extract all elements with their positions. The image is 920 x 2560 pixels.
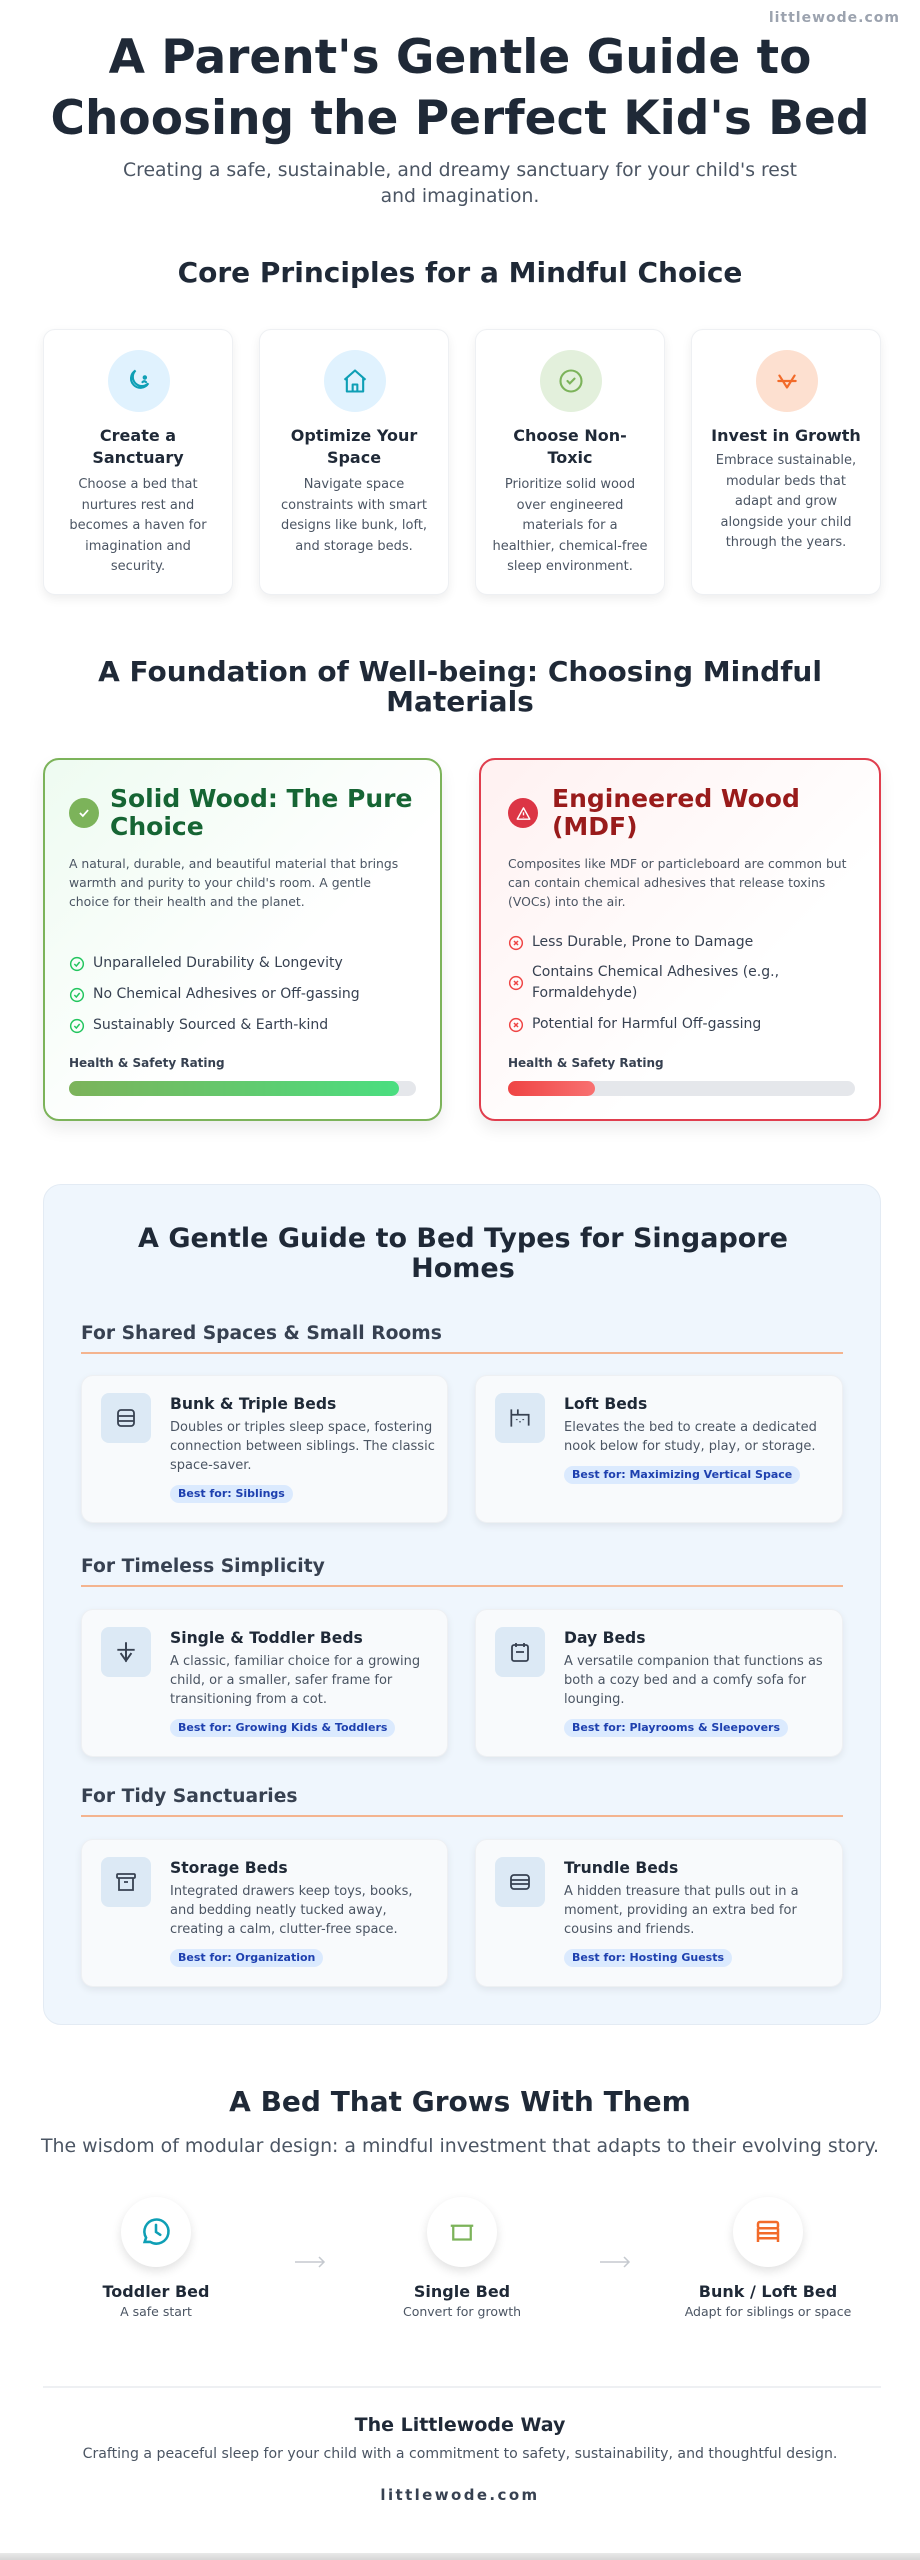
card: single: child, or a smaller, safer frame for: [170, 1673, 392, 1688]
card: bunk: Bunk & Triple Beds: [170, 1395, 336, 1413]
heading: materials: Materials: [386, 685, 534, 718]
icon: warning: [508, 798, 538, 828]
subtitle: and imagination.: [381, 186, 539, 207]
heading: core principles: Core Principles for a Mindful Choice: [178, 256, 742, 289]
card: loft: Loft Beds: [564, 1395, 647, 1413]
heading: bed types: A Gentle Guide to Bed Types for Singapore: [138, 1223, 788, 1254]
card: storage: creating a calm, clutter-free space.: [170, 1922, 398, 1937]
card: growth: through the years.: [726, 535, 846, 550]
card: sanctuary: security.: [111, 559, 165, 574]
card: day bed: [475, 1609, 843, 1757]
card: optimize: designs like bunk, loft,: [281, 518, 427, 533]
timeline: [102, 2214, 851, 2319]
card: sanctuary: Create a: [100, 426, 176, 445]
footer: The Littlewode Way: [355, 2414, 565, 2436]
card: sanctuary: nurtures rest and: [82, 498, 194, 512]
rating bar: Health & Safety Rating: [69, 1056, 225, 1070]
title: engineered: Engineered Wood: [552, 784, 800, 813]
card: day bed: lounging.: [564, 1692, 625, 1707]
card: sanctuary: Choose a bed that: [78, 477, 198, 492]
list: drawbacks: [508, 934, 779, 1032]
card: bunk: [81, 1375, 448, 1523]
subtitle: grows: The wisdom of modular design: a mindful investment that adapts to their evolving story.: [41, 2135, 879, 2157]
icon: loft: [495, 1393, 545, 1443]
card: trundle: A hidden treasure that pulls out in a: [564, 1884, 799, 1899]
card: non-toxic: materials for a: [522, 518, 618, 533]
card: sanctuary: [43, 329, 233, 595]
heading: materials: [98, 655, 822, 718]
text: choice for their health and the planet.: [69, 894, 305, 909]
step: toddler: [102, 2214, 209, 2319]
footer: littlewode.com: [380, 2486, 540, 2504]
heading: bed types: [138, 1223, 788, 1284]
list: drawbacks: Contains Chemical Adhesives (e.g.,: [532, 964, 779, 980]
card: single: Best for: Growing Kids & Toddlers: [178, 1721, 387, 1734]
card: growth: [691, 329, 881, 595]
card: trundle: [475, 1839, 843, 1987]
icon: trundle: [495, 1857, 545, 1907]
icon: storage: [101, 1857, 151, 1907]
heading: materials: A Foundation of Well-being: Choosing Mindful: [98, 655, 822, 688]
card: non-toxic: Toxic: [547, 448, 593, 467]
panel: solid wood: [43, 758, 442, 1121]
subheading: timeless: For Timeless Simplicity: [81, 1556, 325, 1577]
card: trundle: Best for: Hosting Guests: [572, 1951, 724, 1964]
step: single: Single Bed: [414, 2282, 510, 2301]
subheading: tidy: For Tidy Sanctuaries: [81, 1786, 298, 1807]
text: [69, 856, 398, 909]
subtitle: [123, 160, 797, 207]
title: solid wood: Solid Wood: The Pure: [110, 784, 412, 813]
card: optimize: [259, 329, 449, 595]
text: can contain chemical adhesives that release toxins: [508, 875, 825, 890]
icon: bunk: [101, 1393, 151, 1443]
heading: bed types: Homes: [411, 1253, 515, 1284]
rating bar: [508, 1056, 855, 1096]
card: growth: adapt and grow: [735, 494, 837, 509]
list: drawbacks: Formaldehyde): [532, 985, 637, 1001]
card: loft: Elevates the bed to create a dedicated: [564, 1420, 817, 1435]
subheading: shared spaces: For Shared Spaces & Small Rooms: [81, 1323, 442, 1344]
card: non-toxic: over engineered: [517, 498, 623, 512]
icon: moon: [108, 350, 170, 412]
card: non-toxic: [475, 329, 665, 595]
card: growth: Invest in Growth: [711, 426, 861, 445]
card: storage: and bedding neatly tucked away,: [170, 1903, 387, 1918]
title: Choosing the Perfect Kid's Bed: [50, 91, 870, 146]
brand top: littlewode.com: [769, 10, 900, 26]
card: loft: Best for: Maximizing Vertical Space: [572, 1468, 792, 1481]
list: drawbacks: Less Durable, Prone to Damage: [532, 934, 753, 950]
title: solid wood: [110, 784, 412, 841]
step: bunk: Bunk / Loft Bed: [699, 2282, 837, 2301]
card: single: A classic, familiar choice for a growing: [170, 1654, 420, 1669]
icon: bunk bed: [733, 2197, 803, 2267]
subheading: shared spaces: [81, 1321, 843, 1354]
card: bunk: Doubles or triples sleep space, fostering: [170, 1420, 432, 1435]
title: engineered: [552, 784, 800, 841]
icon: single bed: [427, 2197, 497, 2267]
card: bunk: connection between siblings. The classic: [170, 1439, 435, 1454]
step: bunk: [684, 2214, 851, 2319]
step: toddler: Toddler Bed: [102, 2282, 209, 2301]
text: A natural, durable, and beautiful material that brings: [69, 856, 398, 871]
card: trundle: cousins and friends.: [564, 1922, 694, 1937]
icon: clock: [121, 2197, 191, 2267]
card: bunk: space-saver.: [170, 1458, 252, 1473]
arrow: [600, 2256, 630, 2268]
card: day bed: Best for: Playrooms & Sleepovers: [572, 1721, 780, 1734]
footer: [83, 2414, 837, 2504]
icon: day bed: [495, 1627, 545, 1677]
title: engineered: (MDF): [552, 812, 638, 841]
rating bar: [69, 1056, 416, 1096]
card: single: Single & Toddler Beds: [170, 1629, 363, 1647]
card: non-toxic: Prioritize solid wood: [505, 477, 635, 492]
panel: engineered wood: [479, 758, 881, 1121]
step: single: [403, 2214, 521, 2319]
card: day bed: both a cozy bed and a comfy sofa for: [564, 1673, 806, 1688]
card: growth: alongside your child: [720, 514, 852, 530]
footer: Crafting a peaceful sleep for your child with a commitment to safety, sustainability, and thoughtful design.: [83, 2446, 837, 2462]
icon: growth: [756, 350, 818, 412]
card: sanctuary: Sanctuary: [92, 448, 184, 467]
card: storage: Storage Beds: [170, 1859, 288, 1877]
card: single: transitioning from a cot.: [170, 1692, 327, 1707]
list: benefits: [70, 955, 360, 1034]
title: solid wood: Choice: [110, 812, 204, 841]
title: A Parent's Gentle Guide to: [109, 30, 811, 85]
card: storage: Integrated drawers keep toys, books,: [170, 1884, 412, 1899]
step: single: Convert for growth: [403, 2304, 521, 2319]
subtitle: Creating a safe, sustainable, and dreamy sanctuary for your child's rest: [123, 160, 797, 181]
list: drawbacks: Potential for Harmful Off-gassing: [532, 1016, 761, 1032]
card: single: [81, 1609, 448, 1757]
card: optimize: Optimize Your: [291, 426, 417, 445]
list: benefits: Sustainably Sourced & Earth-kind: [93, 1017, 328, 1033]
list: benefits: Unparalleled Durability & Longevity: [93, 955, 343, 971]
panel: bed types: [43, 1184, 881, 2025]
subheading: tidy: [81, 1784, 843, 1817]
title: [50, 30, 870, 146]
arrow: [295, 2256, 325, 2268]
card: optimize: and storage beds.: [295, 538, 413, 554]
card: sanctuary: imagination and: [85, 538, 191, 554]
list: benefits: No Chemical Adhesives or Off-gassing: [93, 986, 360, 1002]
subheading: timeless: [81, 1554, 843, 1587]
icon: house: [324, 350, 386, 412]
card: optimize: constraints with smart: [281, 498, 427, 512]
card: trundle: Trundle Beds: [564, 1859, 678, 1877]
card: storage: [81, 1839, 448, 1987]
text: warmth and purity to your child's room. A gentle: [69, 875, 371, 890]
card: loft: [475, 1375, 843, 1523]
icon: single: [101, 1627, 151, 1677]
card: trundle: moment, providing an extra bed for: [564, 1903, 797, 1918]
card: non-toxic: Choose Non-: [513, 426, 627, 445]
card: growth: Embrace sustainable,: [716, 453, 856, 468]
step: bunk: Adapt for siblings or space: [685, 2304, 851, 2319]
card: loft: nook below for study, play, or storage.: [564, 1439, 815, 1454]
card: day bed: Day Beds: [564, 1629, 646, 1647]
icon: check badge: [69, 798, 99, 828]
card: growth: modular beds that: [726, 474, 846, 488]
card: optimize: Navigate space: [304, 477, 404, 492]
card: non-toxic: sleep environment.: [507, 559, 633, 574]
card: optimize: Space: [327, 448, 381, 467]
text: [508, 856, 847, 909]
text: (VOCs) into the air.: [508, 894, 626, 909]
heading: grows: A Bed That Grows With Them: [229, 2085, 691, 2118]
card: day bed: A versatile companion that functions as: [564, 1654, 823, 1669]
card: sanctuary: becomes a haven for: [69, 518, 207, 533]
card: bunk: Best for: Siblings: [178, 1487, 285, 1500]
card: non-toxic: healthier, chemical-free: [492, 538, 648, 554]
panel: principle cards: [43, 329, 881, 599]
icon: check circle: [540, 350, 602, 412]
card: storage: Best for: Organization: [178, 1951, 315, 1964]
step: toddler: A safe start: [120, 2304, 192, 2319]
text: Composites like MDF or particleboard are common but: [508, 856, 847, 871]
rating bar: Health & Safety Rating: [508, 1056, 664, 1070]
